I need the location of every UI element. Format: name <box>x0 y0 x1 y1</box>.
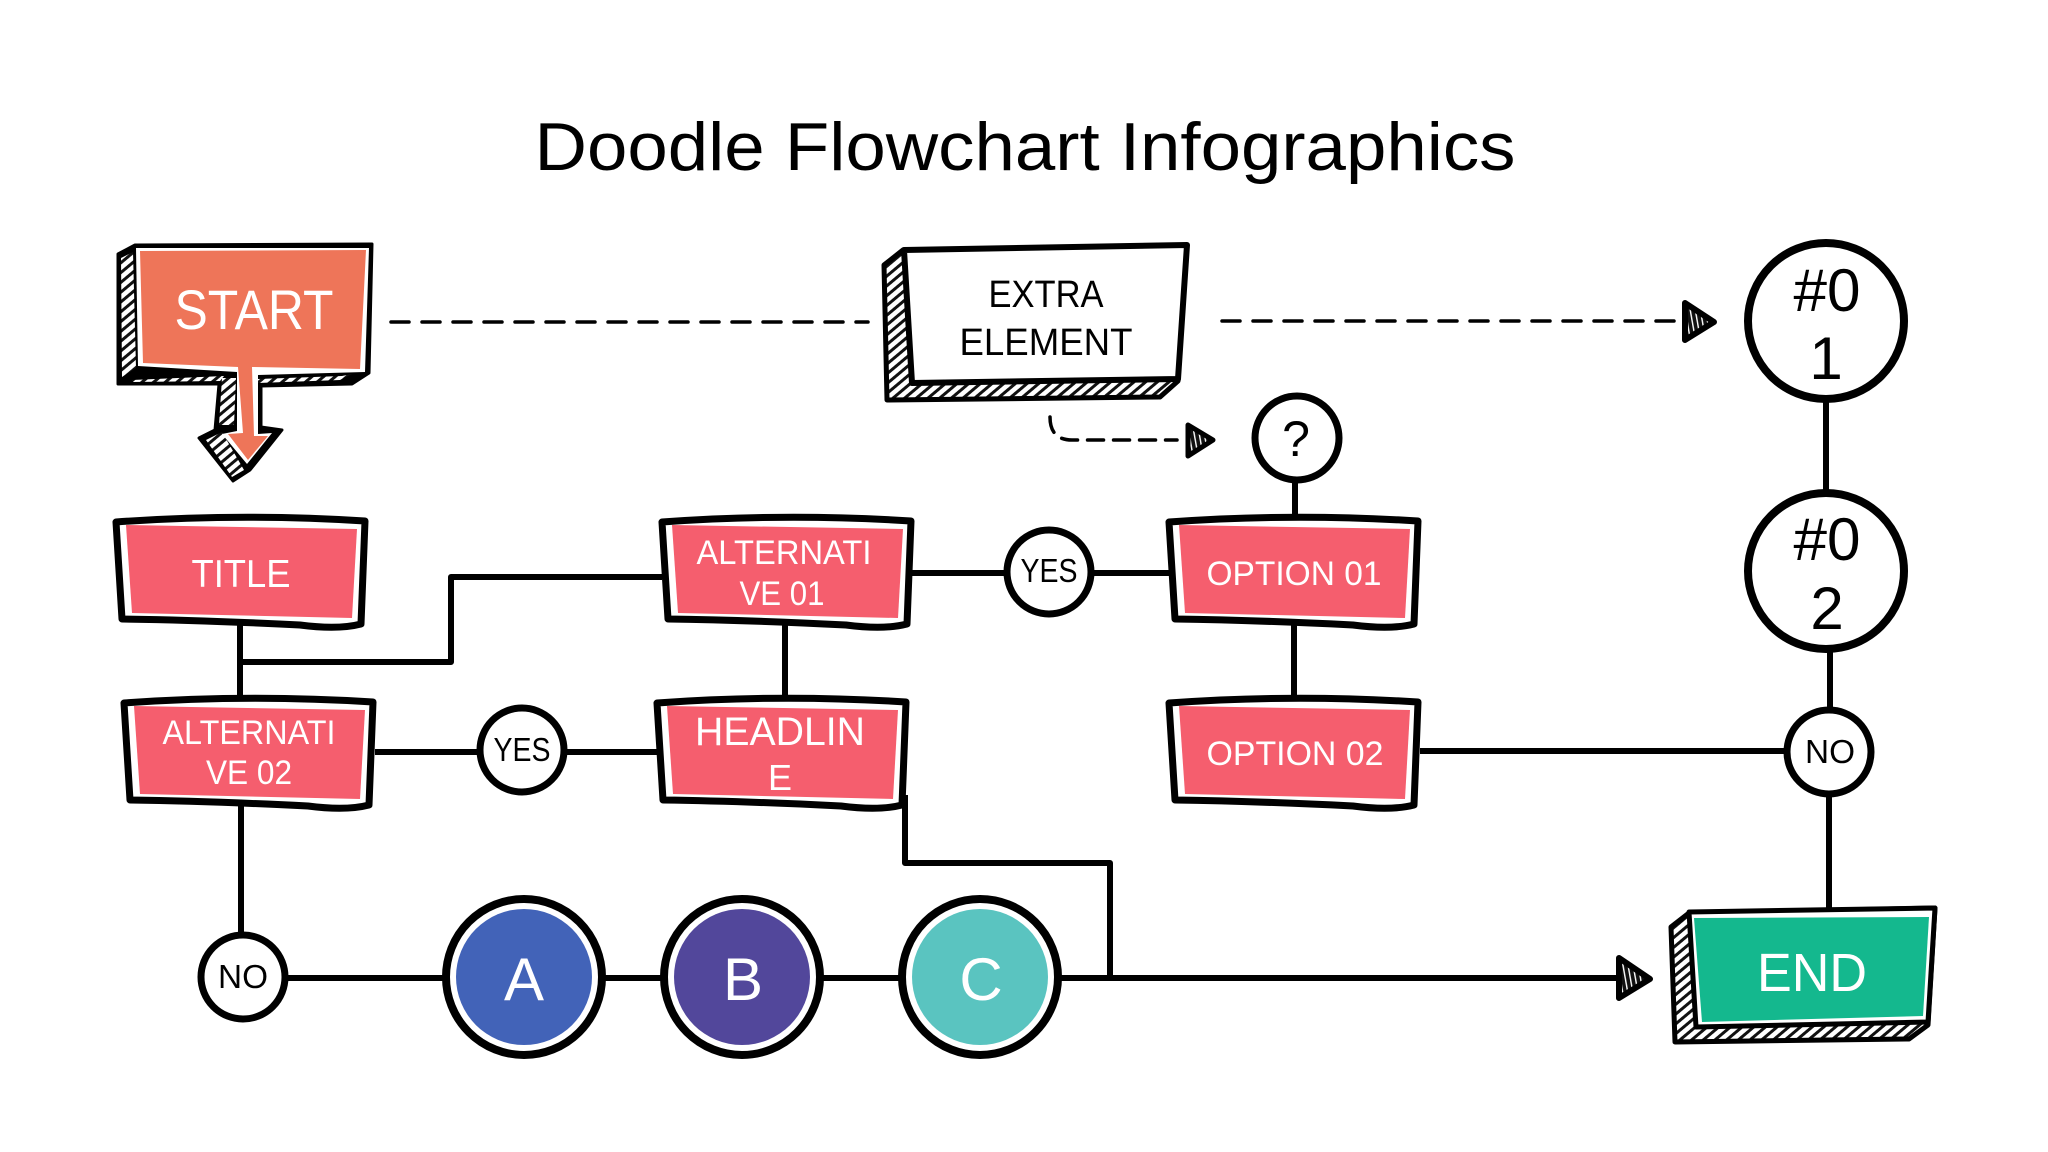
decision: yes left <box>480 708 564 792</box>
end block: END <box>1757 943 1867 1003</box>
option circle A: A <box>504 946 544 1013</box>
decision: yes top <box>1007 530 1091 614</box>
decision: yes top: YES <box>1020 552 1078 589</box>
box: option 01 <box>1169 517 1418 627</box>
step circle 02 <box>1748 493 1904 649</box>
box: headline <box>657 698 906 808</box>
option circle C <box>902 899 1058 1055</box>
decision: no right <box>1787 710 1871 794</box>
extra element block <box>884 245 1187 400</box>
arrow: to end <box>1619 958 1650 998</box>
decision: no right: NO <box>1805 733 1855 770</box>
box: alternative 02: ALTERNATI <box>162 714 336 752</box>
option circle B <box>664 899 820 1055</box>
start side hatching <box>121 252 352 477</box>
dashed arrow: extra element to question <box>1050 417 1213 456</box>
box: option 02: OPTION 02 <box>1206 735 1384 773</box>
option circle B: B <box>723 946 763 1013</box>
decision: yes left: YES <box>494 731 550 768</box>
dashed line: extra element to #01 <box>1222 319 1685 323</box>
option circle C: C <box>959 946 1003 1013</box>
box: headline: E <box>768 757 792 798</box>
arrow: to #01 <box>1685 303 1714 340</box>
extra element block: EXTRA <box>988 274 1104 316</box>
box: title: TITLE <box>192 553 290 596</box>
decision: no left: NO <box>218 958 268 995</box>
end block <box>1671 908 1935 1042</box>
box: alternative 01 <box>662 517 911 627</box>
step circle 02: 2 <box>1810 575 1844 642</box>
box: alternative 02: VE 02 <box>206 754 292 792</box>
box: alternative 01: ALTERNATI <box>696 534 872 572</box>
step circle 02: #0 <box>1794 506 1860 573</box>
dashed line: start to extra element <box>391 320 868 324</box>
question circle <box>1255 396 1339 480</box>
box: option 02 <box>1169 698 1418 808</box>
box: headline: HEADLIN <box>695 710 865 754</box>
question circle: ? <box>1282 411 1310 467</box>
option circle A <box>446 899 602 1055</box>
box: alternative 02 <box>124 698 373 808</box>
box: option 01: OPTION 01 <box>1206 555 1382 593</box>
box: alternative 01: VE 01 <box>740 575 824 613</box>
step circle 01: 1 <box>1809 325 1843 392</box>
step circle 01: #0 <box>1794 257 1860 324</box>
title: Doodle Flowchart Infographics <box>534 109 1516 185</box>
start block: START <box>174 278 334 341</box>
decision: no left <box>201 935 285 1019</box>
start block <box>118 244 372 481</box>
connector lines <box>240 395 1830 978</box>
start face <box>136 248 369 464</box>
extra element block: ELEMENT <box>960 322 1132 364</box>
box: title <box>116 517 365 627</box>
step circle 01 <box>1748 243 1904 399</box>
